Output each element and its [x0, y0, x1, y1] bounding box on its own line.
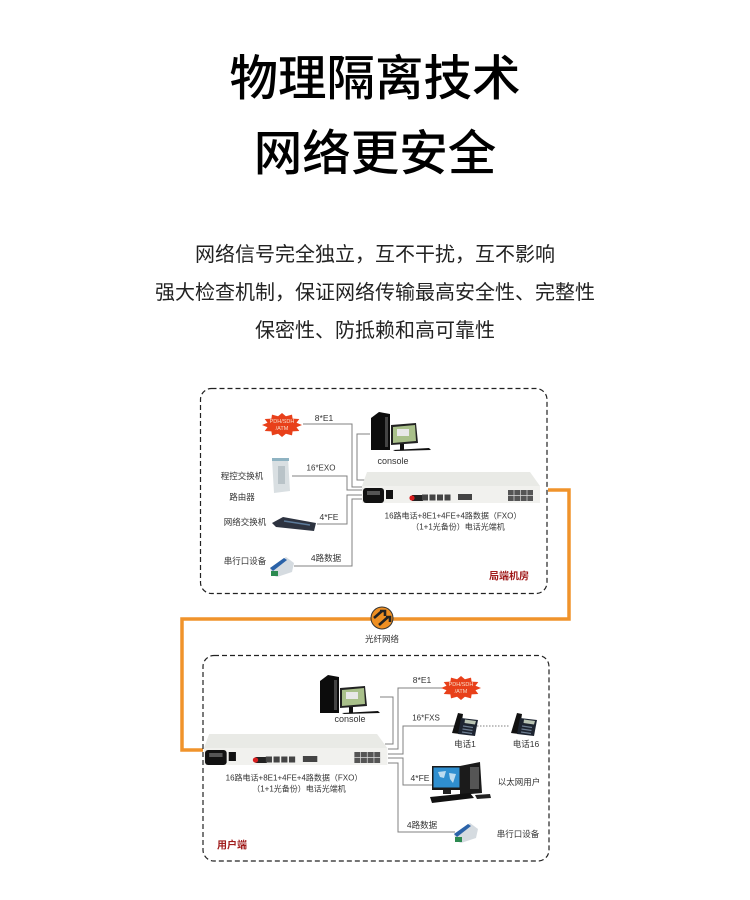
icon: ethernet user computer — [430, 762, 491, 803]
device caption — [226, 772, 362, 794]
label: 8*E1: 8*E1 — [413, 675, 431, 685]
label: phone 16: 电话16 — [513, 739, 539, 749]
icon: phone 16 — [511, 713, 537, 736]
icon: console computer — [320, 675, 380, 714]
description text: 强大检查机制，保证网络传输最高安全性、完整性 — [155, 282, 595, 304]
icon: serial device — [454, 823, 478, 843]
icon: PDH/SDH/ATM cloud: /ATM — [455, 689, 468, 695]
description text: 网络信号完全独立，互不干扰，互不影响 — [195, 244, 555, 266]
icon: console computer — [371, 412, 431, 451]
label: router: 路由器 — [229, 492, 255, 502]
label: 4*FE: 4*FE — [411, 773, 430, 783]
orange fiber link — [182, 490, 569, 750]
label: 16*EXO: 16*EXO — [307, 464, 335, 472]
device caption — [385, 510, 521, 532]
label: user side: 用户端 — [217, 838, 247, 852]
label: switch: 网络交换机 — [224, 517, 267, 527]
label: phone 1: 电话1 — [454, 739, 476, 749]
icon: PDH/SDH/ATM cloud: PDH/SDH — [449, 682, 473, 688]
label: ethernet users: 以太网用户 — [498, 777, 540, 787]
device: optical terminal — [362, 472, 540, 503]
label: serial device: 串行口设备 — [497, 829, 540, 839]
label: 4-channel data: 4路数据 — [311, 553, 342, 563]
icon: PDH/SDH/ATM cloud: /ATM — [276, 426, 289, 432]
device: optical terminal — [204, 734, 387, 765]
device caption: （1+1光备份）电话光端机 — [252, 784, 346, 794]
title — [229, 52, 520, 181]
label: fiber network: 光纤网络 — [365, 634, 399, 644]
device caption: （1+1光备份）电话光端机 — [411, 522, 505, 532]
icon: exchange cabinet — [272, 458, 290, 493]
icon: PDH/SDH/ATM cloud — [441, 676, 481, 700]
label: console: console — [377, 456, 409, 466]
label: 16*FXS: 16*FXS — [412, 714, 440, 722]
title: 物理隔离技术 — [229, 52, 520, 106]
label: 8*E1: 8*E1 — [315, 413, 333, 423]
label: console: console — [334, 714, 366, 724]
panel: central office — [200, 388, 547, 594]
icon: network switch — [272, 517, 316, 531]
panel: user side — [203, 656, 549, 861]
connecting lines: central office — [292, 424, 370, 566]
icon: PDH/SDH/ATM cloud: PDH/SDH — [270, 419, 294, 425]
connecting lines: user side — [380, 688, 510, 832]
description text: 保密性、防抵赖和高可靠性 — [255, 320, 495, 342]
description text — [155, 244, 595, 342]
icon: fiber network — [371, 607, 393, 629]
label: central office room: 局端机房 — [489, 570, 529, 582]
icon: PDH/SDH/ATM cloud — [262, 413, 302, 437]
label: 4*FE: 4*FE — [320, 512, 339, 522]
icon: serial device — [270, 557, 294, 577]
device caption: 16路电话+8E1+4FE+4路数据（FXO） — [385, 510, 521, 520]
label: exchange: 程控交换机 — [221, 471, 264, 481]
title: 网络更安全 — [254, 127, 496, 181]
label: 4-channel data: 4路数据 — [407, 820, 438, 830]
label: serial device: 串行口设备 — [224, 556, 267, 566]
icon: phone 1 — [452, 713, 478, 736]
device caption: 16路电话+8E1+4FE+4路数据（FXO） — [226, 772, 362, 782]
